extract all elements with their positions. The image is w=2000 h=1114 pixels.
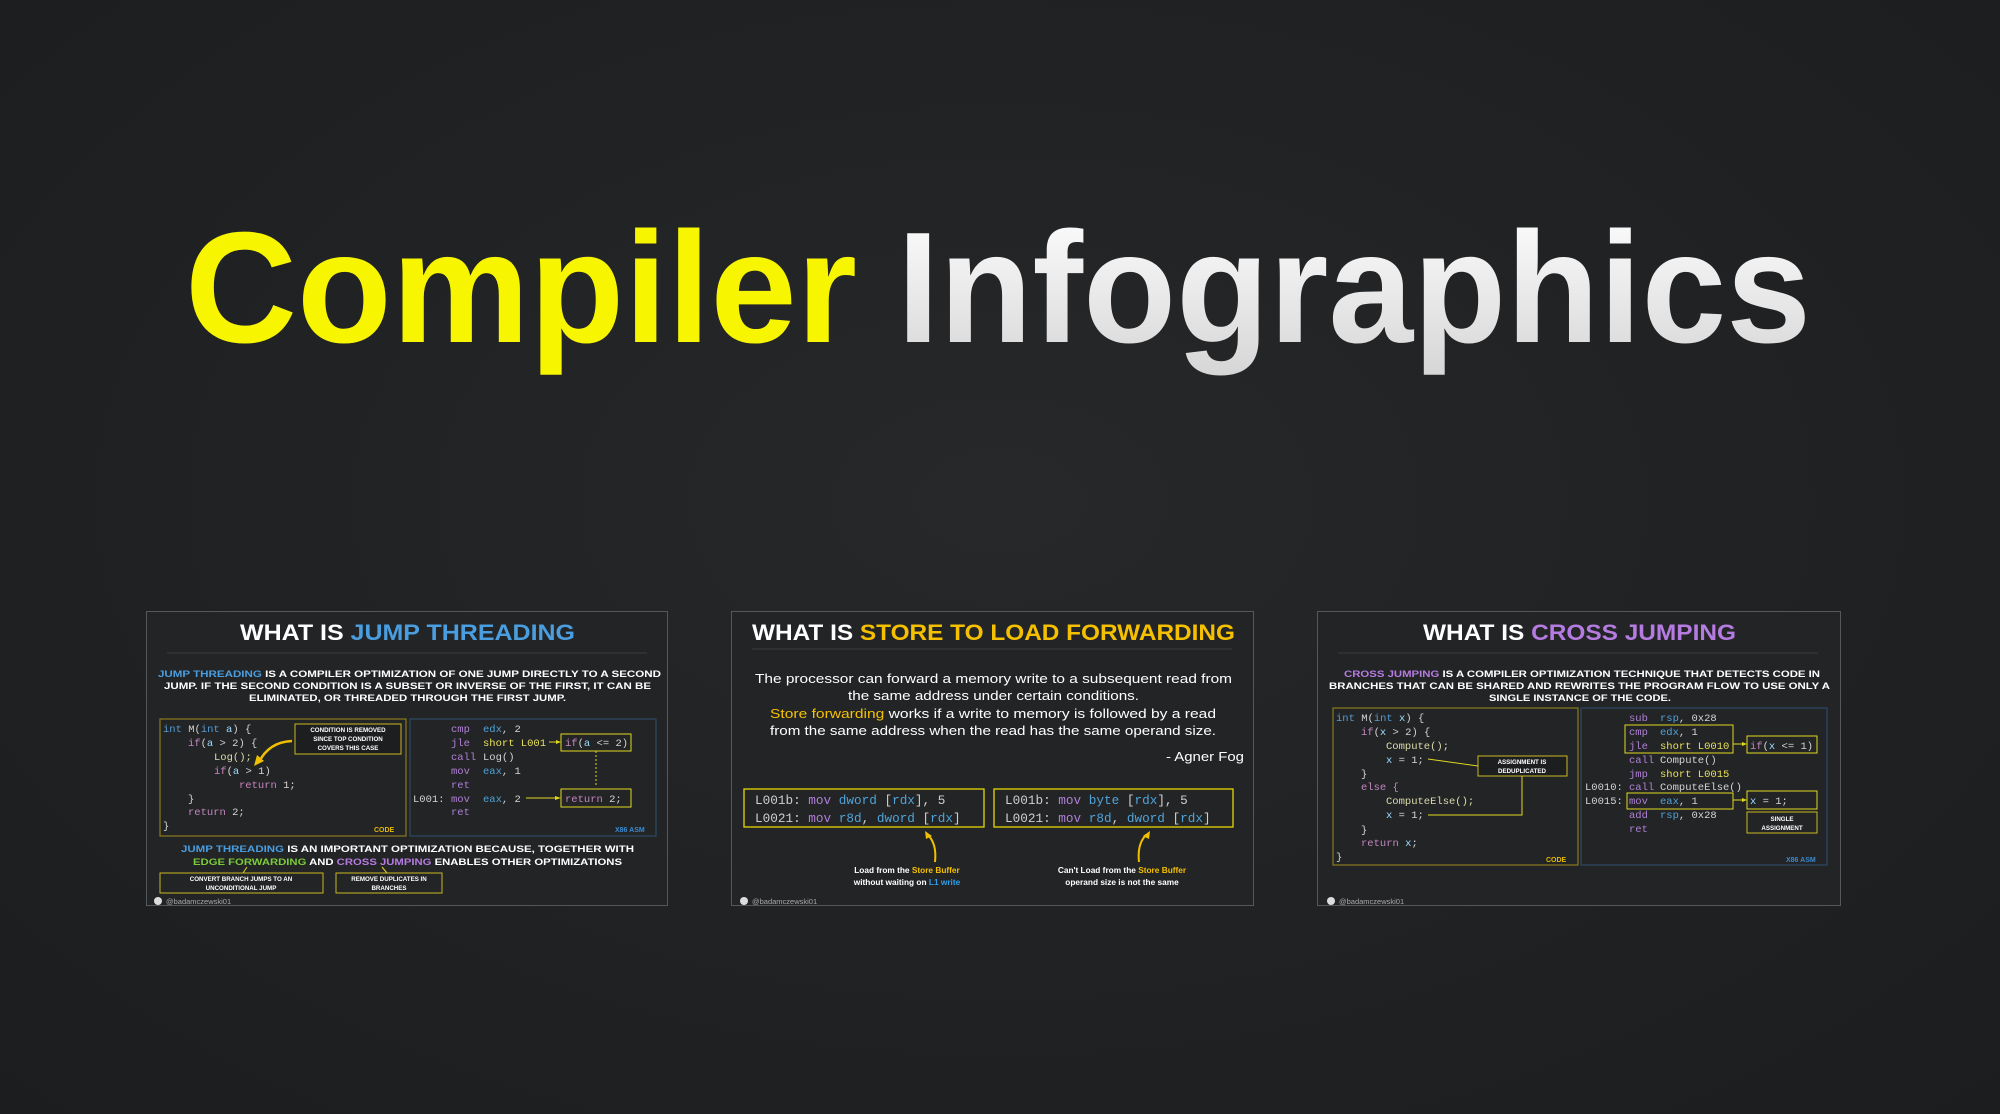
code panel: return x; [1361, 838, 1418, 850]
asm panel: rsp [1660, 713, 1679, 725]
asm panel: L0010: [1585, 782, 1623, 794]
callout: CONDITION IS REMOVED [310, 727, 386, 734]
code box: different size: L0021: mov r8d, dword [rdx] [1005, 811, 1211, 826]
callout: single assignment [1747, 812, 1817, 833]
code panel: } [1336, 852, 1342, 864]
text block: quote: from the same address when the read has the same operand size. [770, 724, 1216, 738]
code box: same size: L0021: mov r8d, dword [rdx] [755, 811, 961, 826]
title [185, 200, 1811, 376]
heading: WHAT IS CROSS JUMPING [1423, 620, 1736, 645]
callout boxes [160, 867, 442, 893]
code panel: return 1; [239, 780, 296, 792]
code panel: if(x > 2) { [1361, 727, 1430, 739]
text block: quote: the same address under certain conditions. [848, 689, 1139, 703]
code box: different size: L001b: mov byte [rdx], 5 [1005, 793, 1188, 808]
code panel: CODE [1546, 857, 1567, 864]
asm panel: short L0015 [1660, 769, 1729, 781]
code panel: Compute(); [1386, 741, 1449, 753]
asm panel: ret [451, 807, 470, 819]
asm panel: short L0010 [1660, 741, 1729, 753]
text block: quote [755, 672, 1244, 764]
asm panel: , 0x28 [1679, 713, 1717, 725]
code panel: x = 1; [1386, 810, 1424, 822]
code box: same size [744, 789, 984, 827]
code panel: else { [1361, 782, 1399, 794]
text block: definition: SINGLE INSTANCE OF THE CODE. [1489, 693, 1671, 704]
text block: importance: JUMP THREADING IS AN IMPORTANT OPTIMIZATION BECAUSE, TOGETHER WITH [181, 844, 634, 855]
callout: SINCE TOP CONDITION [313, 736, 383, 743]
asm panel: ret [1629, 824, 1648, 836]
text block: quote: Store forwarding works if a write to memory is followed by a read [770, 707, 1216, 721]
text block: definition [158, 669, 661, 704]
text block: definition: JUMP. IF THE SECOND CONDITION IS A SUBSET OR INVERSE OF THE FIRST, IT CAN BE [164, 681, 651, 692]
arrow 1 [925, 831, 935, 862]
asm panel: eax [483, 794, 502, 806]
asm panel: X86 ASM [1786, 857, 1816, 864]
asm panel: Log() [483, 752, 515, 764]
asm panel: , 1 [1679, 727, 1698, 739]
code panel: x = 1; [1386, 755, 1424, 767]
captions: Load from the Store Buffer [854, 865, 961, 875]
code panel: } [163, 821, 169, 833]
code panel: if(a > 2) { [188, 738, 257, 750]
asm panel: , 1 [502, 766, 521, 778]
title: Infographics [897, 200, 1811, 376]
asm panel: edx [483, 724, 502, 736]
code panel: ComputeElse(); [1386, 796, 1474, 808]
asm panel: jmp [1629, 769, 1648, 781]
code panel: } [1361, 769, 1367, 781]
asm panel: cmp [1629, 727, 1648, 739]
arrow 2 [1139, 831, 1150, 862]
asm panel: , 2 [502, 724, 521, 736]
asm panel: Compute() [1660, 755, 1717, 767]
heading: WHAT IS JUMP THREADING [240, 620, 575, 645]
footer: @badamczewski01 [752, 897, 817, 906]
heading: WHAT IS STORE TO LOAD FORWARDING [752, 620, 1235, 645]
panel: jump threading [146, 611, 668, 906]
asm panel: call [451, 752, 476, 764]
asm panel: L001: [413, 794, 445, 806]
code panel [160, 719, 406, 836]
text block: definition: ELIMINATED, OR THREADED THROUGH THE FIRST JUMP. [249, 693, 566, 704]
callout [1478, 756, 1567, 776]
callout boxes: CONVERT BRANCH JUMPS TO AN [190, 876, 293, 883]
panel: cross jumping [1317, 611, 1841, 906]
footer: @badamczewski01 [1339, 897, 1404, 906]
asm panel: sub [1629, 713, 1648, 725]
text block: importance [181, 844, 634, 868]
callout [295, 724, 401, 754]
text block: definition: CROSS JUMPING IS A COMPILER OPTIMIZATION TECHNIQUE THAT DETECTS CODE IN [1344, 669, 1820, 680]
asm panel: short L001 [483, 738, 546, 750]
text block: definition: JUMP THREADING IS A COMPILER OPTIMIZATION OF ONE JUMP DIRECTLY TO A SECOND [158, 669, 661, 680]
callout: single assignment: ASSIGNMENT [1761, 825, 1803, 832]
text block: quote: - Agner Fog [1166, 750, 1244, 764]
asm panel: , 2 [502, 794, 521, 806]
asm panel: cmp [451, 724, 470, 736]
code panel: CODE [374, 827, 395, 834]
code box: same size: L001b: mov dword [rdx], 5 [755, 793, 945, 808]
title: Compiler [185, 200, 857, 376]
code panel: int M(int a) { [163, 724, 251, 736]
asm panel: call [1629, 782, 1654, 794]
asm panel [1581, 708, 1827, 865]
code box: different size [994, 789, 1233, 827]
asm panel: , 1 [1679, 796, 1698, 808]
asm panel [410, 719, 656, 836]
asm panel: add [1629, 810, 1648, 822]
captions: Can't Load from the Store Buffer [1058, 865, 1187, 875]
text block: definition [1329, 669, 1830, 704]
captions: without waiting on L1 write [853, 877, 961, 887]
panel: store to load forwarding [731, 611, 1254, 906]
asm panel: , 0x28 [1679, 810, 1717, 822]
asm panel: ComputeElse() [1660, 782, 1742, 794]
asm panel: jle [1629, 741, 1648, 753]
asm panel: L0015: [1585, 796, 1623, 808]
asm panel: if(a <= 2) [565, 738, 628, 750]
captions: operand size is not the same [1065, 877, 1179, 887]
code panel: } [188, 794, 194, 806]
asm panel: eax [483, 766, 502, 778]
asm panel: if(x <= 1) [1750, 741, 1813, 753]
asm panel: edx [1660, 727, 1679, 739]
text block: quote: The processor can forward a memory write to a subsequent read from [755, 672, 1232, 686]
arrow [259, 741, 292, 762]
callout boxes: UNCONDITIONAL JUMP [206, 885, 276, 892]
code panel: Log(); [214, 752, 252, 764]
asm panel: mov [1629, 796, 1648, 808]
code panel: int M(int x) { [1336, 713, 1424, 725]
code panel: } [1361, 825, 1367, 837]
asm panel: x = 1; [1750, 796, 1788, 808]
captions [853, 865, 1187, 887]
code panel: return 2; [188, 807, 245, 819]
callout: ASSIGNMENT IS [1498, 759, 1546, 766]
callout boxes: BRANCHES [371, 885, 407, 892]
asm panel: ret [451, 780, 470, 792]
text block: importance: EDGE FORWARDING AND CROSS JUMPING ENABLES OTHER OPTIMIZATIONS [193, 857, 622, 868]
callout: single assignment: SINGLE [1770, 816, 1794, 823]
asm panel: call [1629, 755, 1654, 767]
text block: definition: BRANCHES THAT CAN BE SHARED AND REWRITES THE PROGRAM FLOW TO USE ONLY A [1329, 681, 1830, 692]
callout: COVERS THIS CASE [318, 745, 378, 752]
asm panel: mov [451, 794, 470, 806]
code panel: if(a > 1) [214, 766, 271, 778]
callout: DEDUPLICATED [1498, 768, 1547, 775]
asm panel: eax [1660, 796, 1679, 808]
footer: @badamczewski01 [166, 897, 231, 906]
asm panel: mov [451, 766, 470, 778]
asm panel: rsp [1660, 810, 1679, 822]
callout boxes: REMOVE DUPLICATES IN [351, 876, 427, 883]
asm panel: jle [451, 738, 470, 750]
asm panel: return 2; [565, 794, 622, 806]
code panel [1333, 708, 1578, 865]
asm panel: X86 ASM [615, 827, 645, 834]
